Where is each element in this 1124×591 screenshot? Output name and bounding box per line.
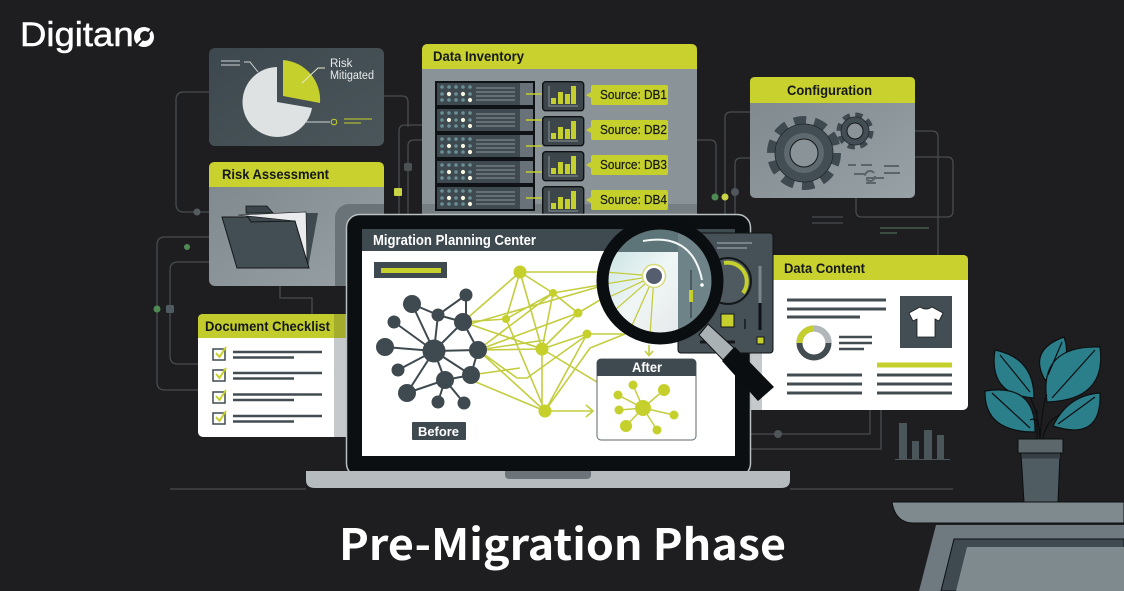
before network <box>376 288 487 410</box>
label: after: After <box>632 360 663 375</box>
circuit lines background <box>157 92 953 489</box>
pot <box>1018 439 1063 502</box>
heading: data inventory: Data Inventory <box>433 48 524 64</box>
knob <box>705 258 751 304</box>
icon: folder <box>222 206 318 268</box>
plant <box>985 337 1101 502</box>
label: before <box>412 422 466 440</box>
label: before: Before <box>418 424 459 439</box>
after network <box>614 380 678 434</box>
pie chart <box>221 60 372 137</box>
source tags <box>586 85 668 210</box>
heading: configuration: Configuration <box>787 82 872 98</box>
heading: risk assessment: Risk Assessment <box>222 166 329 182</box>
magnifying glass <box>600 224 774 401</box>
desk <box>892 502 1124 591</box>
control panel <box>678 233 773 353</box>
icon: gears <box>772 116 900 185</box>
legend lines <box>839 337 872 349</box>
panel: risk mitigated pie chart <box>209 48 384 146</box>
yellow migration network <box>463 266 653 418</box>
panel: risk assessment <box>209 162 384 286</box>
heading: data content: Data Content <box>784 260 865 276</box>
text lines <box>787 300 886 317</box>
panel: data content <box>745 255 968 410</box>
handle <box>699 324 774 401</box>
laptop base <box>306 471 790 488</box>
server rack <box>435 81 542 211</box>
source tags: Source: DB3 <box>600 158 667 172</box>
source tags: Source: DB1 <box>600 88 667 102</box>
icon: t-shirt <box>900 296 952 348</box>
label: risk mitigated: Mitigated <box>330 70 374 82</box>
title: Pre-Migration Phase <box>339 511 786 573</box>
circuit nodes <box>154 163 782 438</box>
bottom text lines <box>787 375 952 393</box>
logo: Digitano <box>20 16 154 54</box>
after box <box>597 359 696 440</box>
label: risk mitigated <box>330 58 374 82</box>
placeholder tag <box>374 262 447 278</box>
lens ring <box>602 224 718 338</box>
bar chart icons <box>543 82 584 216</box>
screen <box>362 229 735 456</box>
leaves <box>985 337 1101 432</box>
checklist rows <box>213 347 322 424</box>
heading: migration planning center: Migration Planning Center <box>373 233 536 249</box>
background bar chart <box>895 423 950 460</box>
source tags: Source: DB4 <box>600 193 667 207</box>
panel: configuration <box>750 77 915 198</box>
laptop <box>306 214 790 488</box>
source tags: Source: DB2 <box>600 123 667 137</box>
label: risk mitigated: Risk <box>330 58 353 70</box>
donut chart <box>800 328 828 358</box>
panel: data inventory <box>422 44 697 216</box>
stems and veins <box>992 342 1095 439</box>
heading: document checklist: Document Checklist <box>205 318 330 334</box>
lens view <box>608 230 712 332</box>
panel: document checklist <box>198 314 348 437</box>
